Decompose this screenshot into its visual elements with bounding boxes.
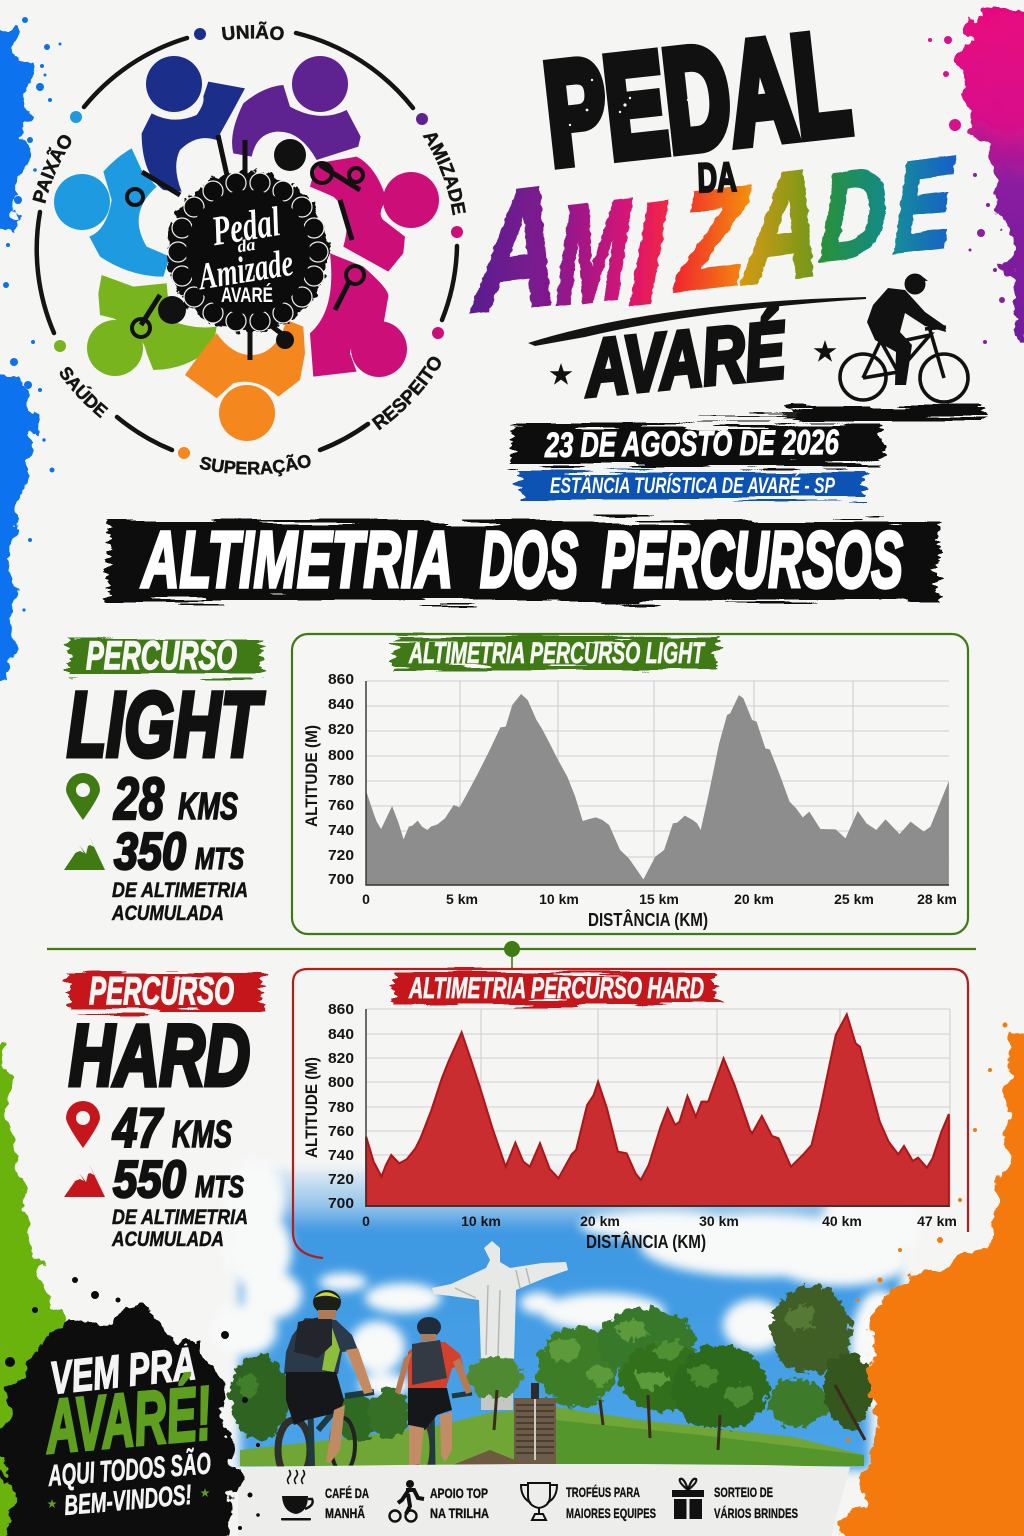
altitude tick labels: 820 [328,721,354,738]
emblem wordmark: da [236,235,257,256]
green star left [47,1499,57,1508]
label: CAFÉ DA [325,1485,369,1501]
ring of faces [168,173,328,331]
icon: cyclist silhouette [840,274,968,402]
icon: mountain [64,1166,105,1197]
logo: Pedal da Amizade circular emblem [32,21,466,476]
label [566,1484,656,1521]
altitude tick labels: 760 [328,1123,354,1140]
altitude tick labels: 800 [328,1074,354,1091]
distance tick labels: 0 [362,1213,370,1229]
ring words: UNIÃO [222,21,284,40]
distance tick labels: 40 km [822,1213,862,1229]
elevation caption: ACUMULADA [111,1228,224,1251]
title: AMIZADE rainbow: M [555,170,632,333]
heading text: DOS [480,515,578,604]
title: AMIZADE rainbow: I [629,172,667,334]
heading text: ALTIMETRIA [141,515,453,604]
heading text [141,515,903,604]
ring words: AMIZADE [422,132,466,216]
green star right [200,1488,210,1497]
altitude tick labels: 720 [328,847,354,864]
icon: mountain [64,838,105,870]
date banner [512,423,882,466]
distance tick labels: 0 [362,891,370,907]
title: AMIZADE rainbow: D [820,142,887,286]
distance tick labels: 10 km [539,891,579,907]
altitude tick labels: 840 [328,696,354,713]
panel: percurso hard summary [64,970,262,1251]
elevation caption: DE ALTIMETRIA [112,1206,248,1229]
distance tick labels: 20 km [580,1213,620,1229]
bottom services strip [238,1464,850,1536]
elevation caption [111,879,248,925]
label: NA TRILHA [430,1505,489,1521]
route name LIGHT: LIGHT [67,674,265,776]
ring words: RESPEITO [371,356,441,430]
jersey [284,1318,358,1374]
distance tick labels: 10 km [461,1213,501,1229]
black splatter [0,1277,260,1536]
altitude axis title: ALTITUDE (M) [302,725,321,827]
label: APOIO TOP [430,1485,488,1501]
altitude tick labels [328,671,354,888]
label: TROFÉUS PARA [566,1484,640,1500]
top right magenta and purple paint splatter [928,8,1024,345]
star right [814,340,836,362]
altitude tick labels [328,1001,354,1212]
hard elevation area [366,1014,949,1206]
elevation unit: MTS [195,1169,244,1204]
icon: map pin [66,1101,100,1148]
callout line 2: AVARÉ! [41,1371,215,1470]
distance tick labels: 47 km [917,1213,957,1229]
leg [326,1405,345,1463]
altitude tick labels: 700 [328,1195,354,1212]
elevation caption: ACUMULADA [111,902,224,925]
distance tick labels: 25 km [834,891,874,907]
bottom right orange paint splatter [818,1022,1024,1536]
altitude tick labels: 860 [328,1001,354,1018]
blue brush [520,472,864,499]
distance axis title: DISTÂNCIA (KM) [588,909,708,930]
altitude tick labels: 700 [328,871,354,888]
trees [230,1286,872,1441]
bottom left green paint splatter [0,1040,60,1536]
title block [471,4,985,420]
elevation value: 550 [113,1151,186,1209]
chart title tag [394,637,716,670]
service: troféus [521,1483,656,1521]
shorts [286,1372,344,1425]
altitude tick labels: 720 [328,1171,354,1188]
badge percurso: PERCURSO [86,634,237,678]
altitude tick labels: 780 [328,772,354,789]
panel: light altimetry chart [292,634,968,934]
date brush [512,425,882,466]
panel frame [293,969,968,1258]
title: AMIZADE rainbow: Z [674,157,750,320]
panel: percurso light summary [64,634,265,925]
panel frame [292,634,968,934]
emblem wordmark [194,199,296,307]
elevation unit: MTS [195,841,244,876]
grid [366,681,949,885]
icon: map pin [66,773,100,820]
altitude tick labels: 740 [328,822,354,839]
bike silhouettes around centre [127,135,364,360]
grid [366,1009,950,1206]
chart title tag: ALTIMETRIA PERCURSO HARD [408,972,704,1005]
axes [366,681,949,885]
label: SORTEIO DE [714,1484,773,1500]
torn white band [238,1464,850,1536]
distance tick labels [362,1213,957,1229]
axes [366,1009,950,1206]
chart title tag [394,972,716,1005]
emblem wordmark: Amizade [194,242,296,298]
backpack [294,1314,332,1358]
distance unit: KMS [172,1114,232,1156]
cyclist left [278,1290,374,1480]
distance tick labels: 30 km [699,1213,739,1229]
service: apoio top [390,1480,489,1522]
title: AMIZADE rainbow [471,130,955,349]
ring words [32,21,509,476]
label: MANHÃ [325,1504,365,1521]
black brush [108,521,938,601]
altitude tick labels: 800 [328,747,354,764]
cyclist right [395,1317,472,1474]
helmet [313,1290,341,1314]
distance unit: KMS [178,786,238,828]
altitude tick labels: 760 [328,797,354,814]
route name HARD: HARD [69,1008,250,1104]
panel: hard altimetry chart [293,969,968,1258]
label [430,1485,489,1521]
service: café da manhã [281,1470,369,1521]
altitude tick labels: 780 [328,1099,354,1116]
callout line 1: VEM PRA [48,1337,198,1404]
ring words: SUPERAÇÃO [200,454,311,476]
ring arcs [37,33,457,450]
seven people figures [54,56,439,441]
label [714,1484,798,1521]
centre black blob [168,172,328,332]
title: AMIZADE rainbow: E [894,130,955,279]
chart title tag: ALTIMETRIA PERCURSO LIGHT [408,637,706,670]
distance value: 28 [113,766,164,832]
distance value: 47 [112,1096,164,1159]
distance axis title: DISTÂNCIA (KM) [586,1231,706,1252]
location banner [520,472,864,499]
emblem wordmark: AVARÉ [221,284,273,307]
arm [346,1348,373,1394]
distance tick labels: 20 km [734,891,774,907]
statue [432,1241,568,1410]
distance tick labels: 15 km [639,891,679,907]
brush swoosh [528,297,866,346]
altitude tick labels: 740 [328,1147,354,1164]
ground brush under cyclist [700,407,985,420]
grass hills [240,1407,864,1466]
altitude tick labels: 840 [328,1026,354,1043]
callout line 3: AQUI TODOS SÃO [46,1446,212,1493]
title: AMIZADE rainbow: A [741,137,822,315]
callout: vem pra Avaré [0,1277,260,1536]
elevation caption: DE ALTIMETRIA [112,879,248,902]
photo: Cristo statue landscape with cyclists [213,1160,920,1480]
altitude tick labels: 860 [328,671,354,688]
stairs [514,1383,556,1464]
distance tick labels: 5 km [446,891,478,907]
elevation value: 350 [114,823,186,881]
emblem wordmark: Pedal [208,199,283,255]
elevation caption [111,1206,248,1251]
label: VÁRIOS BRINDES [714,1505,798,1521]
title speckles [569,47,830,126]
label: MAIORES EQUIPES [566,1505,656,1521]
service: sorteio [672,1479,798,1521]
distance tick labels: 28 km [917,891,957,907]
clouds [213,1160,920,1410]
badge percurso: PERCURSO [89,970,234,1013]
label [325,1485,369,1521]
bike wheel [278,1420,310,1480]
ring words: PAIXÃO [32,134,72,204]
location text: ESTÂNCIA TURÍSTICA DE AVARÉ - SP [550,473,835,498]
section heading: altimetria [108,515,938,604]
left blue paint splatter [0,17,62,680]
icon: trophy [521,1483,557,1520]
altitude axis title: ALTITUDE (M) [302,1057,321,1158]
ring dots [54,28,463,459]
date text: 23 DE AGOSTO DE 2026 [544,423,839,465]
sky [240,1170,900,1470]
light elevation area [366,694,949,885]
icon: coffee cup [281,1470,313,1520]
icon: gift box [672,1479,704,1519]
ring words: SAÚDE [60,367,108,418]
callout line 4: BEM-VINDOS! [63,1479,193,1521]
title: AVARÉ: AVARÉ [580,305,791,413]
title: AMIZADE rainbow: A [471,148,560,349]
title: DA: DA [697,154,737,201]
distance tick labels [362,891,957,907]
star left [550,363,572,385]
divider with connector dot [47,941,976,969]
altitude tick labels: 820 [328,1050,354,1067]
icon: cyclist support [390,1480,424,1522]
